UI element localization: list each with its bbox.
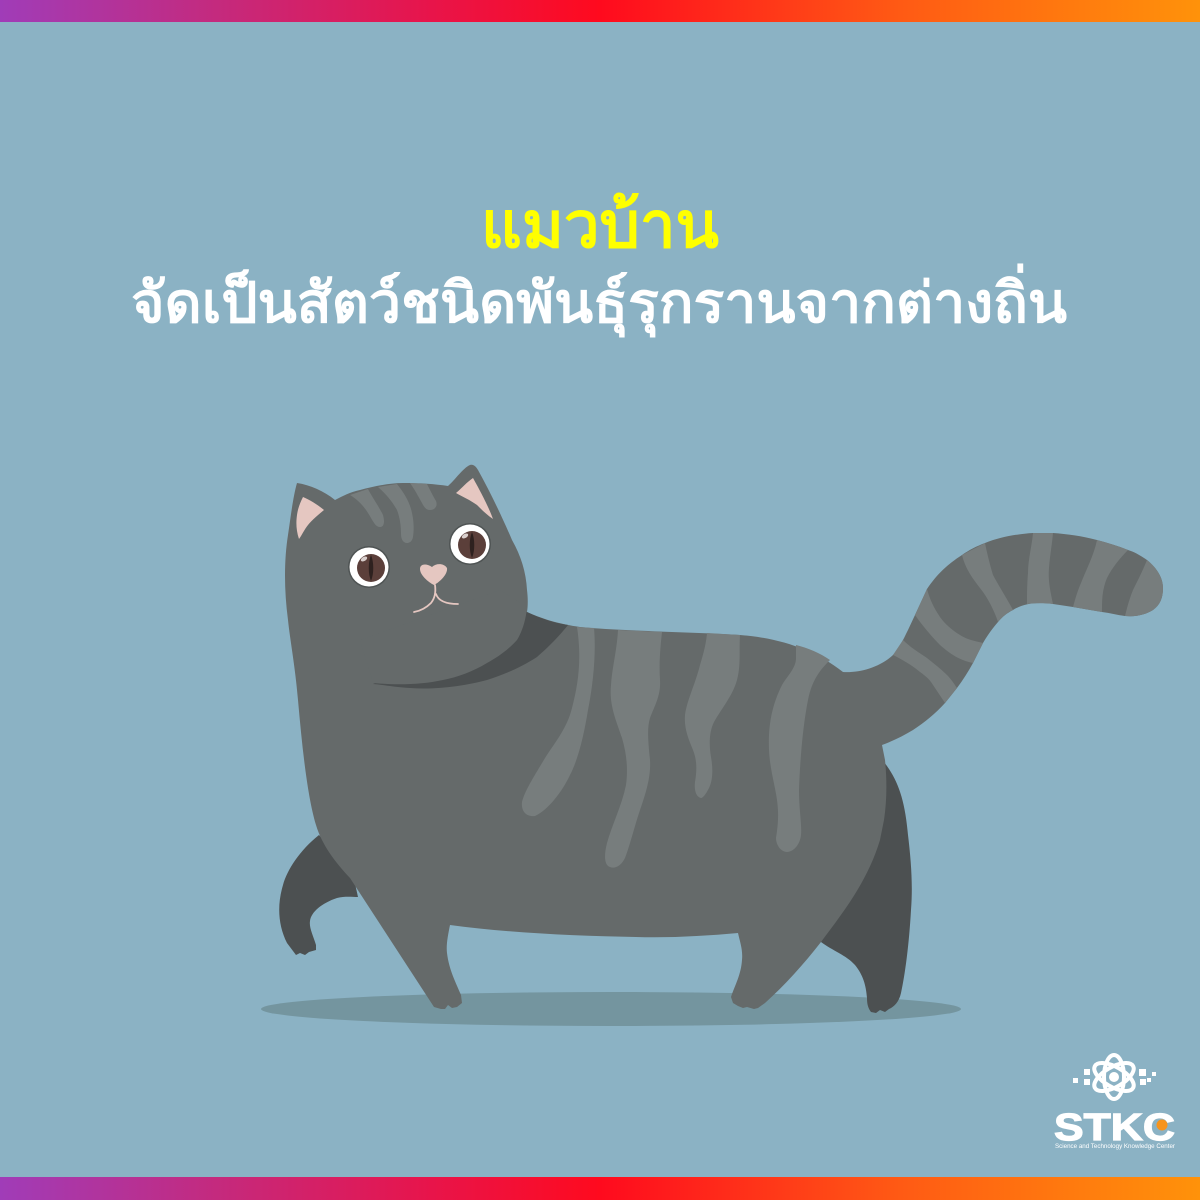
stripe 1	[522, 627, 595, 816]
nose	[420, 564, 447, 585]
mouth	[414, 585, 458, 612]
logo wordmark: STKC	[1054, 1107, 1175, 1149]
body stripes	[522, 627, 830, 868]
right eye	[449, 523, 491, 565]
subtitle: invasive alien species: จัดเป็นสัตว์ชนิดพันธุ์รุกรานจากต่างถิ่น	[131, 263, 1067, 338]
right ear inner	[456, 478, 493, 519]
logo orange dot	[1156, 1120, 1168, 1130]
head lower contour	[360, 590, 527, 684]
left eye	[348, 546, 390, 588]
tail stripe d	[1027, 533, 1053, 604]
logo tagline: Science and Technology Knowledge Center	[1055, 1144, 1175, 1150]
stripe 2	[605, 630, 662, 868]
left ear inner	[296, 497, 324, 539]
stripe 4	[769, 645, 830, 852]
tail stripe c	[962, 543, 1013, 622]
bottom gradient bar	[0, 1177, 1200, 1200]
heading: domestic cat: แมวบ้าน	[481, 189, 719, 261]
tail stripes	[893, 533, 1163, 703]
illustration: grey tabby cat	[279, 465, 1163, 1013]
back right leg	[821, 762, 912, 1013]
neck shadow	[373, 612, 568, 689]
tail stripe a	[893, 640, 957, 703]
logo: STKC	[1054, 1055, 1175, 1150]
top gradient bar	[0, 0, 1200, 22]
body and tail	[285, 465, 1163, 1009]
logo atom icon	[1090, 1055, 1138, 1099]
title	[131, 189, 1067, 338]
cat face	[296, 478, 493, 612]
head stripes	[350, 483, 437, 543]
tail stripe e	[1073, 540, 1128, 612]
stripe 3	[685, 633, 740, 798]
logo pixel squares	[1073, 1069, 1156, 1085]
tail stripe f	[1125, 560, 1163, 616]
tail stripe b	[915, 589, 983, 663]
ground shadow	[261, 992, 961, 1026]
back left leg	[279, 835, 358, 955]
